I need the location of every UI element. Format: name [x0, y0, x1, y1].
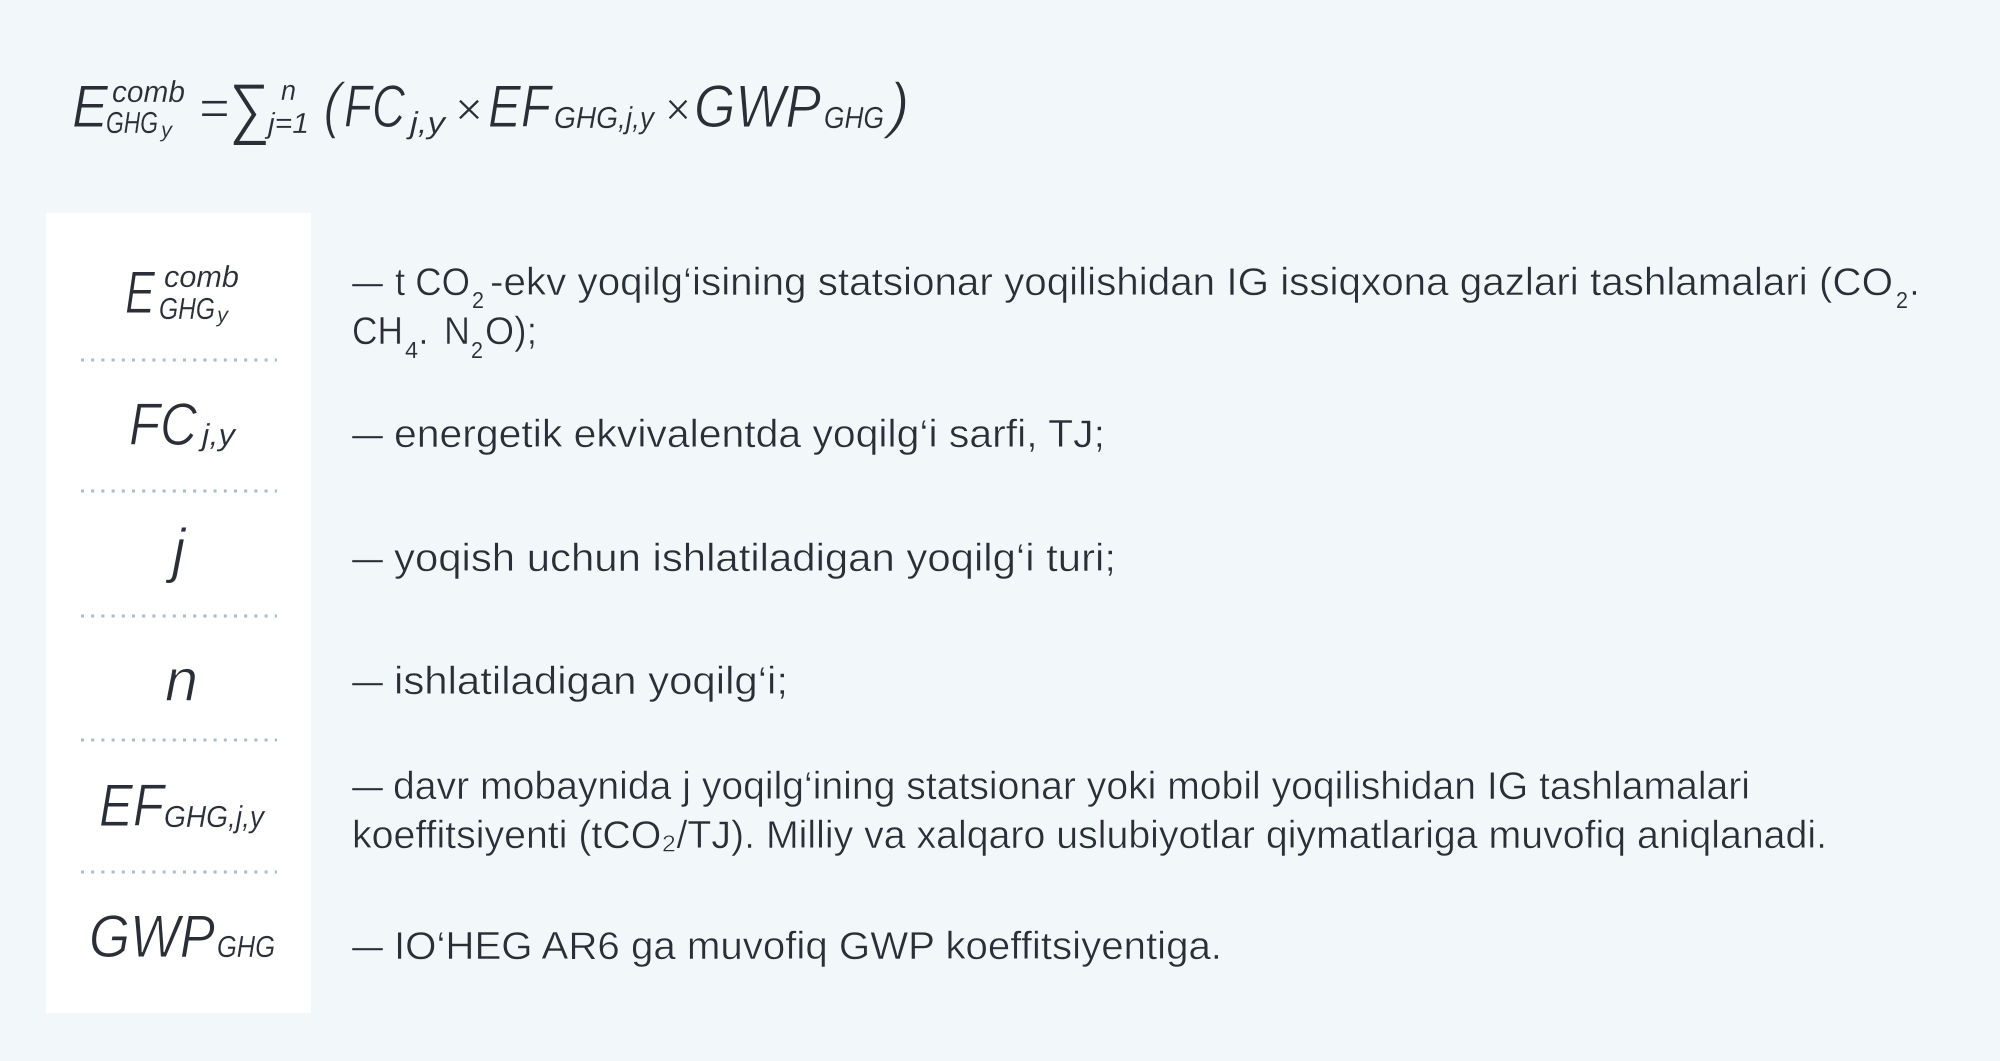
- title: main formula: ×: [455, 83, 483, 135]
- text block: definition of E comb: -ekv yoqilg‘isining statsionar yoqilishidan IG issiqxona gazlari tashlamalari (CO: [490, 261, 1893, 304]
- title: main formula: j,y: [405, 105, 448, 140]
- text block: definition of E comb: 2: [472, 287, 484, 313]
- title: main formula: y: [159, 119, 174, 142]
- text block: definition of EF: [352, 765, 1827, 857]
- text block: definition of E comb: O);: [485, 310, 537, 353]
- symbol: E comb GHG y: E: [125, 259, 156, 326]
- symbol: E comb GHG y: [125, 259, 239, 327]
- text block: definition of E comb: CH: [352, 310, 403, 353]
- symbol: FC j,y: FC: [129, 391, 198, 458]
- title: main formula: GHG: [106, 105, 158, 140]
- text block: definition of E comb: 2: [471, 337, 483, 363]
- symbol: FC j,y: j,y: [198, 417, 238, 452]
- text block: definition of EF: davr mobaynida j yoqilg‘ining statsionar yoki mobil yoqilishidan IG tashlamalari: [393, 765, 1750, 808]
- title: main formula: GWP: [694, 73, 821, 140]
- title: main formula: =: [199, 80, 230, 136]
- text block: definition of EF: koeffitsiyenti (tCO₂/TJ). Milliy va xalqaro uslubiyotlar qiymatlariga muvofiq aniqlanadi.: [352, 814, 1827, 857]
- text block: definition of EF: —: [352, 765, 383, 808]
- text block: definition of E comb: .: [1909, 261, 1920, 304]
- title: main formula: EF: [488, 73, 554, 140]
- text block: definition of E comb: [352, 261, 1920, 363]
- text block: definition of E comb: .: [418, 310, 429, 353]
- symbol: n: n: [165, 647, 198, 714]
- title: main formula: ): [881, 71, 910, 140]
- text block: definition of j: yoqish uchun ishlatiladigan yoqilg‘i turi;: [394, 537, 1116, 580]
- text block: definition of E comb: 4: [405, 337, 418, 363]
- symbol: EF GHG,j,y: [99, 772, 266, 839]
- text block: definition of j: —: [352, 537, 383, 580]
- text block: definition of E comb: N: [444, 310, 470, 353]
- text block: definition of n: —: [352, 660, 383, 703]
- title: main formula: FC: [344, 73, 406, 140]
- text block: definition of E comb: t CO: [395, 261, 470, 304]
- symbol: E comb GHG y: comb: [164, 259, 239, 294]
- text block: definition of E comb: 2: [1896, 287, 1908, 313]
- symbol: E comb GHG y: GHG: [159, 291, 215, 326]
- symbol: j: j: [165, 517, 187, 584]
- text block: definition of E comb: —: [352, 261, 383, 304]
- title: main formula: n: [281, 75, 296, 107]
- title: main formula: ∑: [229, 70, 270, 146]
- symbol: E comb GHG y: y: [215, 304, 230, 327]
- title: main formula: j=1: [264, 108, 309, 140]
- panel: symbols column: [46, 213, 311, 1013]
- text block: definition of n: ishlatiladigan yoqilg‘i;: [394, 660, 788, 703]
- symbol: EF GHG,j,y: GHG,j,y: [164, 799, 266, 834]
- symbol: EF GHG,j,y: EF: [99, 772, 167, 839]
- title: main formula: comb: [112, 74, 185, 109]
- symbol: GWP GHG: GWP: [89, 903, 215, 970]
- title: main formula: ×: [665, 83, 691, 135]
- title: main formula: (: [323, 71, 347, 140]
- title: main formula: GHG: [824, 100, 884, 135]
- title: main formula: [72, 70, 910, 146]
- text block: definition of GWP: —: [352, 925, 383, 968]
- title: main formula: E: [72, 73, 109, 140]
- title: main formula: GHG,j,y: [554, 100, 656, 135]
- text block: definition of GWP: IO‘HEG AR6 ga muvofiq GWP koeffitsiyentiga.: [394, 925, 1222, 968]
- symbol: GWP GHG: GHG: [217, 929, 275, 964]
- text block: definition of FC: —: [352, 413, 383, 456]
- text block: definition of FC: energetik ekvivalentda yoqilg‘i sarfi, TJ;: [394, 413, 1105, 456]
